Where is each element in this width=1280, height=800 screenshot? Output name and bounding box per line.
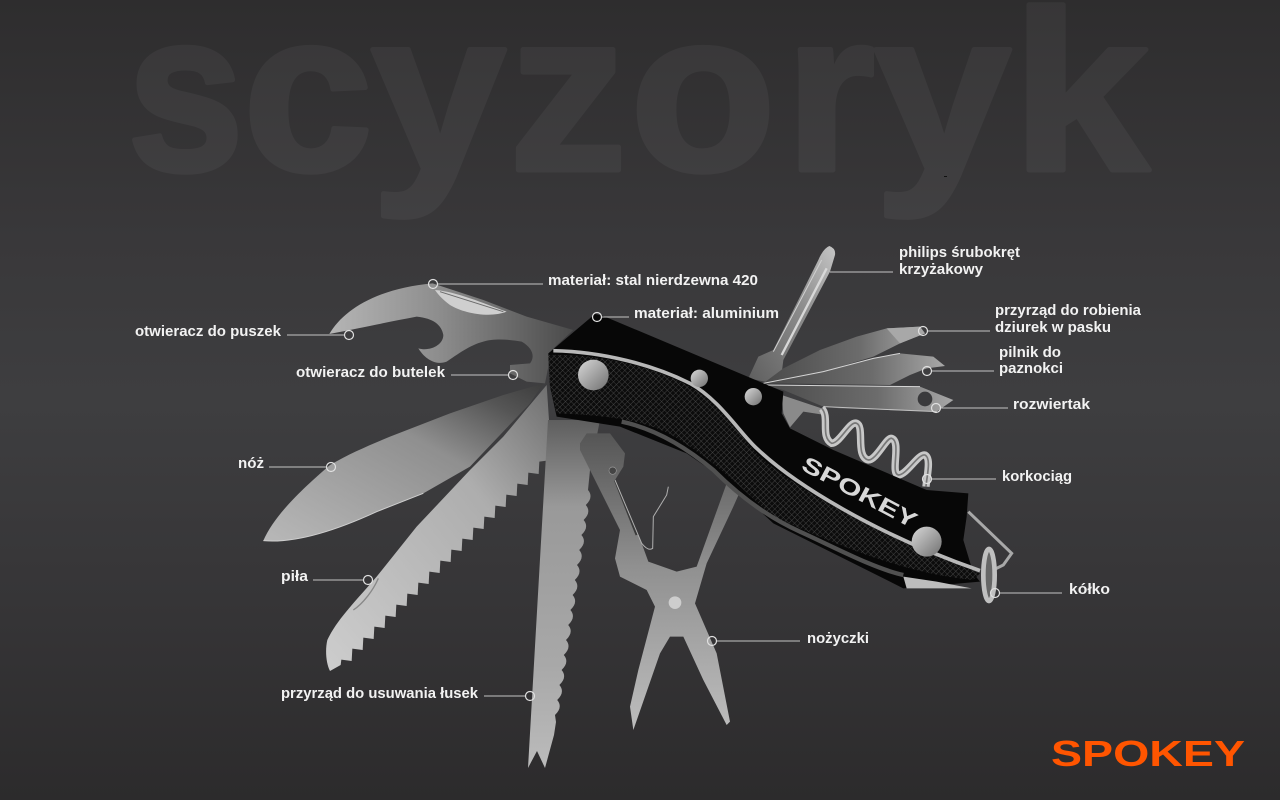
label: pilnik do paznokci [922, 345, 1063, 377]
tool: nail file [763, 353, 945, 385]
label: philips śrubokręt krzyżakowy [830, 245, 1020, 278]
label: przyrząd do robienia dziurek w pasku [918, 303, 1142, 336]
label: korkociąg: korkociąg [1002, 469, 1072, 485]
label: pilnik do paznokci: paznokci [999, 361, 1063, 377]
label: kółko: kółko [1069, 582, 1110, 598]
label: materiał aluminium: materiał: aluminium [634, 306, 779, 322]
handle [548, 314, 980, 588]
label: przyrząd do robienia dziurek w pasku: dziurek w pasku [995, 320, 1111, 336]
label: nóż [238, 456, 336, 472]
label: piła: piła [281, 569, 309, 585]
label: przyrząd do robienia dziurek w pasku: przyrząd do robienia [995, 303, 1142, 319]
tool: scissors [580, 433, 740, 730]
brand logo: SPOKEY: SPOKEY [1051, 733, 1245, 774]
title: scyzoryk [127, 0, 1150, 219]
label: nożyczki: nożyczki [807, 631, 869, 647]
tool: leather punch [763, 327, 925, 383]
tool: corkscrew [782, 395, 928, 487]
label: philips śrubokręt krzyżakowy: philips śrubokręt [899, 245, 1020, 261]
rivets [578, 360, 609, 390]
tool: can and bottle opener blade [329, 283, 573, 383]
key ring link and ring [968, 512, 1012, 601]
label: rozwiertak: rozwiertak [1013, 397, 1091, 413]
label: nożyczki [708, 631, 869, 647]
label: otwieracz do puszek: otwieracz do puszek [135, 324, 282, 340]
label: kółko [990, 582, 1110, 598]
handle logo: SPOKEY: SPOKEY [798, 451, 922, 533]
label: materiał stal: materiał: stal nierdzewna 420 [548, 273, 758, 289]
label: otwieracz do puszek [135, 324, 354, 340]
label: materiał stal [428, 273, 758, 289]
label: otwieracz do butelek [296, 365, 518, 381]
label: rozwiertak [932, 397, 1091, 413]
label: otwieracz do butelek: otwieracz do butelek [296, 365, 446, 381]
tool: saw blade [326, 385, 552, 671]
tool: reamer [763, 385, 953, 412]
label: korkociąg [922, 469, 1072, 485]
tool: fish scaler blade [528, 420, 600, 768]
label: pilnik do paznokci: pilnik do [999, 345, 1061, 361]
tools: right side group [548, 246, 1012, 601]
label: piła [281, 569, 372, 585]
tool: knife blade [263, 383, 543, 541]
label: nóż: nóż [238, 456, 264, 472]
label: philips śrubokręt krzyżakowy: krzyżakowy [899, 262, 983, 278]
tool: philips screwdriver [748, 246, 835, 383]
label: przyrząd do usuwania łusek: przyrząd do usuwania łusek [281, 686, 479, 702]
multitool illustration [263, 246, 1012, 768]
